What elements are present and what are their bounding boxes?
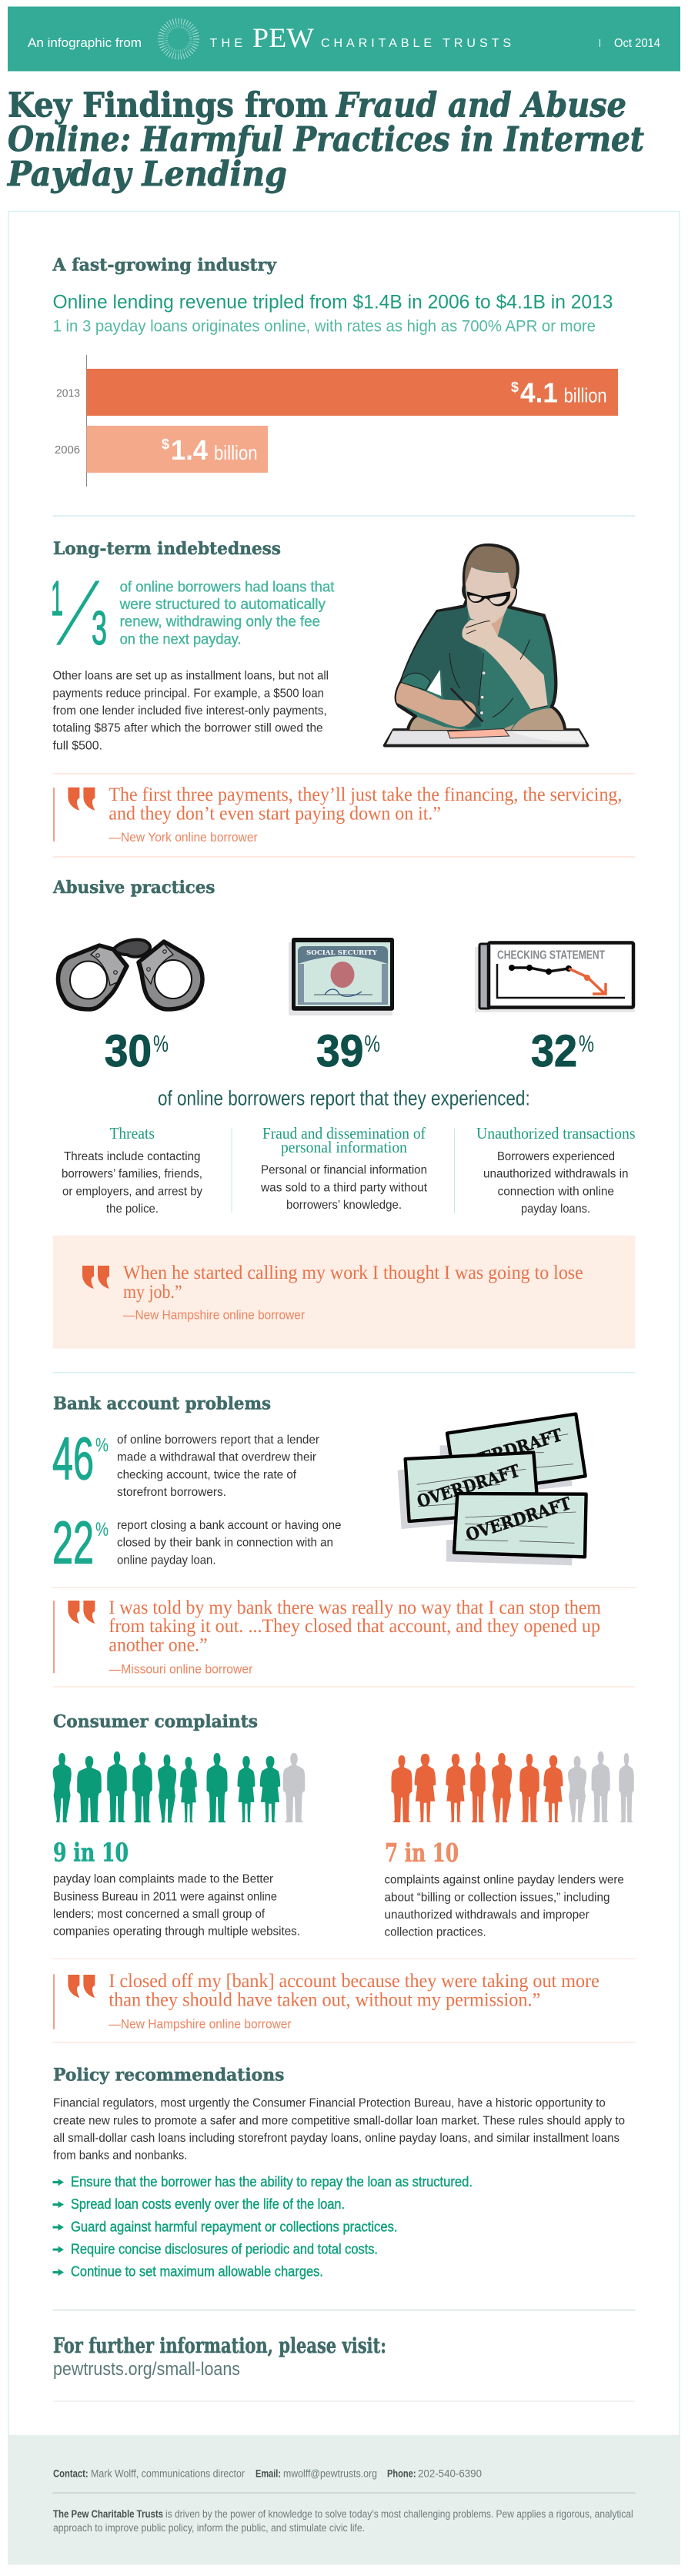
back check xyxy=(447,1414,586,1495)
stat text: were structured to automatically xyxy=(119,597,326,613)
icon: quotation mark xyxy=(68,1601,95,1624)
column: threats: the police. xyxy=(106,1203,159,1216)
stat: 7 in 10: 7 in 10 xyxy=(385,1838,459,1868)
text: billing complaints: collection practices. xyxy=(385,1926,486,1939)
text: billing complaints: complaints against online payday lenders were xyxy=(385,1874,624,1887)
icon: social security card: SOCIAL SECURITY xyxy=(306,948,377,956)
text: BBB complaints: payday loan complaints made to the Better xyxy=(53,1873,274,1886)
stat text: checking account, twice the rate of xyxy=(117,1468,297,1481)
body text: payments reduce principal. For example, a $500 loan xyxy=(52,687,324,700)
stat: 22 percent: 22 xyxy=(52,1509,94,1577)
big fraction one third xyxy=(51,570,107,655)
column: fraud and dissemination: Personal or financial information xyxy=(261,1164,427,1176)
heading: A fast-growing industry xyxy=(52,256,277,276)
icon: quotation mark xyxy=(68,788,95,811)
stat text xyxy=(117,1519,342,1567)
column: threats: Threats xyxy=(109,1124,155,1142)
column: unauthorized transactions xyxy=(476,1124,636,1216)
quote box: New Hampshire borrower: —New Hampshire online borrower xyxy=(123,1307,305,1323)
section: abusive practices xyxy=(52,878,636,1349)
column: unauthorized transactions: Unauthorized transactions xyxy=(476,1124,636,1142)
heading: Abusive practices xyxy=(52,878,215,898)
icon: checking statement xyxy=(475,942,635,1012)
recommendation list: Spread loan costs evenly over the life of the loan. xyxy=(71,2196,345,2212)
quote: Missouri borrower: from taking it out. ...They closed that account, and they opened up xyxy=(109,1616,600,1637)
contact line: 202-540-6390 xyxy=(418,2468,482,2480)
quote: New Hampshire borrower: than they should have taken out, without my permission.” xyxy=(109,1990,540,2011)
heading: Bank account problems xyxy=(53,1394,271,1414)
stat: 32 percent: % xyxy=(579,1030,594,1057)
paragraph: all small-dollar cash loans including storefront payday loans, online payday loans, and similar installment loans xyxy=(53,2132,620,2145)
contact line: Contact: xyxy=(53,2468,89,2480)
quote: New York borrower: and they don’t even start paying down on it.” xyxy=(109,803,441,824)
bar 2013 xyxy=(56,369,618,416)
recommendation list xyxy=(52,2174,473,2280)
quote: New Hampshire borrower xyxy=(53,1971,599,2031)
people chart: 9 in 10 xyxy=(53,1751,305,1822)
stat text: renew, withdrawing only the fee xyxy=(120,614,320,631)
header date: Oct 2014 xyxy=(614,37,660,50)
text: billing complaints: about “billing or collection issues,” including xyxy=(385,1891,610,1904)
column: threats xyxy=(62,1124,202,1216)
stat text: storefront borrowers. xyxy=(117,1486,226,1499)
stat: 46 percent: 46 xyxy=(52,1424,94,1492)
paragraph xyxy=(53,2097,625,2162)
quote: New York borrower: The first three payments, they’ll just take the financing, the servicing, xyxy=(109,785,622,805)
paragraph: from banks and nonbanks. xyxy=(53,2149,187,2162)
stat: 39 percent: 39 xyxy=(316,1026,363,1076)
bar 2013: 4.1 xyxy=(520,377,558,409)
about text: The Pew Charitable Trusts xyxy=(53,2508,163,2520)
Pew wordmark xyxy=(209,22,511,53)
footer panel xyxy=(8,2435,680,2565)
text: BBB complaints: companies operating through multiple websites. xyxy=(53,1925,300,1939)
icon: checking statement: CHECKING STATEMENT xyxy=(497,949,605,962)
text: BBB complaints: lenders; most concerned a small group of xyxy=(53,1908,266,1921)
bar 2013: $ xyxy=(511,380,519,395)
stat text xyxy=(119,579,335,647)
people chart: 7 in 10 xyxy=(391,1751,634,1822)
Pew wordmark: CHARITABLE TRUSTS xyxy=(321,37,511,50)
paragraph: create new rules to promote a safer and more competitive small-dollar loan market. These rules should apply to xyxy=(53,2114,625,2127)
middle check: OVERDRAFT xyxy=(415,1460,523,1512)
section: bank account problems xyxy=(52,1394,586,1577)
quote: New Hampshire borrower: —New Hampshire online borrower xyxy=(109,2016,292,2031)
further information xyxy=(53,2334,386,2380)
bar 2006: 1.4 xyxy=(171,434,208,466)
bar 2006 xyxy=(55,426,268,473)
header intro text: An infographic from xyxy=(28,35,142,50)
text: BBB complaints xyxy=(53,1873,300,1939)
text: billing complaints: unauthorized withdrawals and improper xyxy=(385,1909,589,1922)
heading: Consumer complaints xyxy=(53,1711,258,1731)
bar 2006: $ xyxy=(162,437,169,452)
recommendation list: Guard against harmful repayment or collections practices. xyxy=(71,2219,397,2234)
stat: 30 percent: % xyxy=(153,1030,169,1057)
stat: 9 in 10: 9 in 10 xyxy=(53,1837,129,1867)
about text: is driven by the power of knowledge to solve today’s most challenging problems. Pew applies a rigorous, analytical xyxy=(165,2508,633,2520)
quote: Missouri borrower: I was told by my bank there was really no way that I can stop them xyxy=(109,1597,602,1618)
contact line: Mark Wolff, communications director xyxy=(91,2468,245,2480)
title: Payday Lending xyxy=(6,155,287,194)
column: fraud and dissemination: personal information xyxy=(281,1138,407,1156)
stat: 22 percent: % xyxy=(95,1519,109,1541)
quote: New York borrower: —New York online borrower xyxy=(109,830,258,845)
contact line: Phone: xyxy=(387,2468,416,2480)
text: billing complaints xyxy=(385,1874,624,1939)
quote: Missouri borrower xyxy=(53,1597,602,1676)
icon: quotation mark xyxy=(82,1266,109,1289)
column: threats: borrowers’ families, friends, xyxy=(62,1168,202,1181)
stat text: made a withdrawal that overdrew their xyxy=(117,1451,317,1464)
section: long-term indebtedness xyxy=(51,539,587,752)
stat text: online payday loan. xyxy=(117,1554,215,1567)
illustration: overdraft checks xyxy=(398,1414,586,1565)
bar 2013: billion xyxy=(564,384,607,407)
contact line: mwolff@pewtrusts.org xyxy=(283,2468,377,2480)
stat text: of online borrowers report that a lender xyxy=(117,1434,320,1447)
column: unauthorized transactions: Borrowers experienced xyxy=(497,1150,615,1163)
column: threats: Threats include contacting xyxy=(64,1150,200,1163)
column: unauthorized transactions: unauthorized withdrawals in xyxy=(483,1168,628,1181)
stat text: on the next payday. xyxy=(120,631,242,647)
big fraction one third: 3 xyxy=(92,602,107,655)
stat text xyxy=(117,1434,320,1499)
illustration: man thinking and writing at a desk xyxy=(385,545,587,745)
stat: 46 percent: % xyxy=(95,1435,109,1457)
front check: OVERDRAFT xyxy=(463,1494,574,1545)
body text: full $500. xyxy=(52,739,102,752)
supporting line: 1 in 3 payday loans originates online, with rates as high as 700% APR or more xyxy=(52,317,596,336)
section: policy recommendations xyxy=(52,2065,625,2280)
column: fraud and dissemination: was sold to a third party without xyxy=(260,1181,428,1194)
column: unauthorized transactions: connection with online xyxy=(497,1186,614,1199)
column: fraud and dissemination: Fraud and dissemination of xyxy=(262,1124,426,1142)
Pew wordmark: PEW xyxy=(252,22,314,53)
back check: OVERDRAFT xyxy=(455,1425,565,1476)
stat text: report closing a bank account or having one xyxy=(117,1519,342,1532)
further information: pewtrusts.org/small-loans xyxy=(53,2359,240,2380)
text: BBB complaints: Business Bureau in 2011 were against online xyxy=(53,1890,277,1903)
body text: from one lender included five interest-only payments, xyxy=(52,704,327,718)
icon: Pew sunburst logo xyxy=(161,22,196,57)
stat: 32 percent: 32 xyxy=(531,1026,577,1076)
stat: 39 percent: % xyxy=(365,1030,380,1057)
column: fraud and dissemination xyxy=(260,1124,428,1212)
subheading: Online lending revenue tripled from $1.4B in 2006 to $4.1B in 2013 xyxy=(52,292,613,313)
about text xyxy=(53,2508,633,2534)
further information: For further information, please visit: xyxy=(53,2334,386,2358)
section: a fast-growing industry xyxy=(52,256,618,487)
quote: Missouri borrower: another one.” xyxy=(109,1634,208,1655)
quote box: New Hampshire borrower xyxy=(52,1236,636,1349)
heading: Policy recommendations xyxy=(53,2065,284,2085)
quote box: New Hampshire borrower: When he started calling my work I thought I was going to lose xyxy=(123,1263,583,1283)
stat: 30 percent: 30 xyxy=(105,1026,152,1076)
recommendation list: Require concise disclosures of periodic and total costs. xyxy=(71,2241,378,2257)
icon: quotation mark xyxy=(68,1975,95,1998)
icon: social security card xyxy=(289,938,394,1015)
contact line xyxy=(53,2468,482,2480)
statement line: of online borrowers report that they experienced: xyxy=(158,1087,530,1110)
header banner xyxy=(8,6,680,71)
contact line: Email: xyxy=(255,2468,281,2480)
recommendation list: Continue to set maximum allowable charges. xyxy=(71,2264,323,2280)
title: Fraud and Abuse xyxy=(335,86,626,125)
bar 2006: 2006 xyxy=(55,444,80,457)
quote: New Hampshire borrower: I closed off my [bank] account because they were taking out more xyxy=(109,1971,599,1992)
Pew wordmark: THE xyxy=(209,37,242,50)
column: unauthorized transactions: payday loans. xyxy=(521,1203,590,1216)
column: threats: or employers, and arrest by xyxy=(62,1186,202,1199)
stat text: of online borrowers had loans that xyxy=(120,579,335,595)
quote box: New Hampshire borrower: my job.” xyxy=(123,1282,182,1303)
big fraction one third: 1 xyxy=(51,570,63,626)
paragraph: Financial regulators, most urgently the Consumer Financial Protection Bureau, have a historic opportunity to xyxy=(53,2097,606,2110)
bar 2006: billion xyxy=(214,441,258,464)
body text: Other loans are set up as installment loans, but not all xyxy=(52,670,329,683)
heading: Long-term indebtedness xyxy=(53,539,281,559)
bar 2013: 2013 xyxy=(56,388,80,400)
about text: approach to improve public policy, inform the public, and stimulate civic life. xyxy=(53,2522,365,2534)
icon: handcuffs xyxy=(58,939,202,1012)
body text: totaling $875 after which the borrower still owed the xyxy=(52,722,323,735)
bar chart: online lending revenue xyxy=(55,355,618,487)
body text xyxy=(52,670,329,752)
recommendation list: Ensure that the borrower has the ability to repay the loan as structured. xyxy=(71,2174,473,2190)
quote: Missouri borrower: —Missouri online borrower xyxy=(109,1661,253,1676)
column: fraud and dissemination: borrowers’ knowledge. xyxy=(286,1199,402,1212)
stat text: closed by their bank in connection with an xyxy=(117,1537,333,1550)
quote: New York borrower xyxy=(53,785,622,845)
title: Key Findings from xyxy=(8,86,328,125)
section: consumer complaints xyxy=(53,1711,634,1939)
title xyxy=(6,86,644,194)
